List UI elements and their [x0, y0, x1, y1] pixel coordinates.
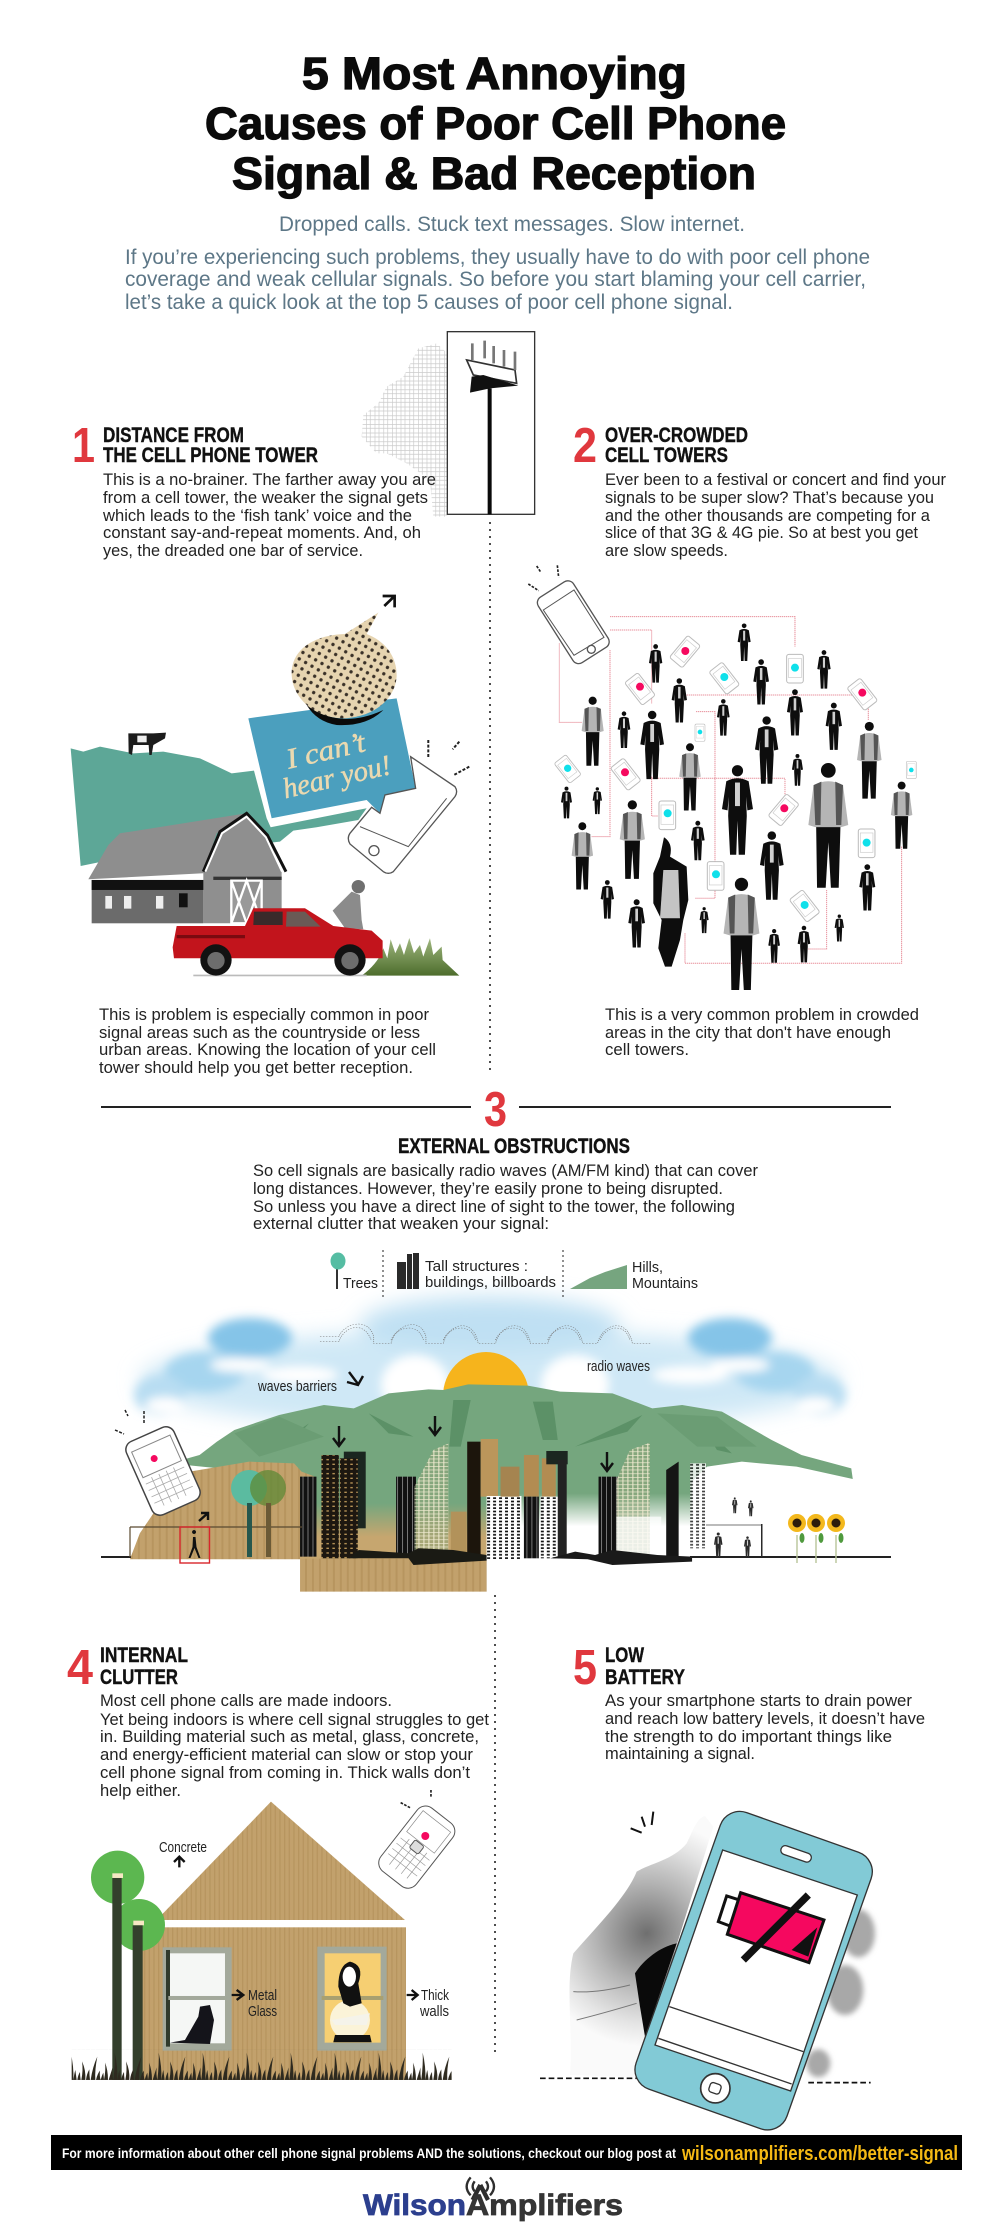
arrows: wave barrier markers [333, 1372, 613, 1471]
panel: cause 1 distance from tower [71, 419, 469, 1077]
logo: Wilson Amplifiers: Wilson [363, 2189, 466, 2222]
trees [91, 1851, 165, 2080]
blackberry phone [123, 1424, 203, 1518]
title: 5 Most Annoying [302, 48, 687, 99]
dotted divider: lower [494, 1595, 496, 2056]
heading 4 [100, 1644, 188, 1689]
title [205, 48, 786, 199]
caption 1 [99, 1005, 436, 1077]
man at hood [333, 880, 365, 929]
cardboard hill and base [130, 1462, 315, 1559]
speech card: I can't hear you [248, 698, 416, 818]
heading 4: CLUTTER [100, 1666, 178, 1689]
caption 2 [605, 1005, 919, 1059]
grass [72, 2050, 452, 2080]
body text 5: the strength to do important things like [605, 1727, 892, 1746]
dashed ground line [540, 2078, 871, 2083]
heading 3: EXTERNAL OBSTRUCTIONS [398, 1135, 630, 1158]
body text 4: Most cell phone calls are made indoors. [100, 1691, 392, 1710]
pedestrian in red box [180, 1527, 210, 1563]
label: thick walls [419, 1988, 450, 2020]
icon: hill [570, 1265, 627, 1289]
heading 1: DISTANCE FROM [103, 424, 244, 447]
buildings [300, 1439, 706, 1565]
body text 1: This is a no-brainer. The farther away you are [103, 470, 436, 489]
legend label: tall structures: buildings, billboards [425, 1275, 556, 1291]
body text 5: and reach low battery levels, it doesn’t have [605, 1709, 925, 1728]
heading 2: CELL TOWERS [605, 444, 728, 467]
signal ticks [631, 1812, 653, 1833]
body text 1: constant say-and-repeat moments. And, oh [103, 523, 421, 542]
dotted divider: upper [489, 522, 491, 1070]
intro text block: let’s take a quick look at the top 5 causes of poor cell phone signal. [125, 291, 733, 314]
legend [330, 1250, 698, 1299]
body text 4: Yet being indoors is where cell signal struggles to get [100, 1710, 489, 1729]
body text 3: So cell signals are basically radio waves (AM/FM kind) that can cover [253, 1161, 758, 1180]
body text 4: cell phone signal from coming in. Thick walls don’t [100, 1763, 470, 1782]
body text 4: in. Building material such as metal, glass, concrete, [100, 1727, 479, 1746]
caption 1: tower should help you get better reception. [99, 1058, 413, 1077]
barn [88, 813, 286, 923]
footer bar: For more information about other cell phone signal problems AND the solutions, checkout our blog post at [62, 2146, 676, 2161]
icon: tree [330, 1252, 346, 1289]
footer bar [51, 2135, 962, 2170]
legend label: hills: Hills, [632, 1260, 663, 1276]
icon: antenna [467, 2177, 494, 2200]
panel: cause 2 over-crowded towers [528, 419, 946, 1059]
label: concrete: Concrete [159, 1840, 207, 1856]
battery icon [718, 1893, 824, 1963]
arrow [199, 1513, 208, 1521]
caption 1: signal areas such as the countryside or less [99, 1023, 420, 1042]
illustration: sky and clouds [134, 1297, 846, 1430]
heading 5: BATTERY [605, 1666, 685, 1689]
dotted speech balloon [292, 613, 397, 725]
radio waves [320, 1324, 651, 1343]
body text 2: and the other thousands are competing for a [605, 506, 931, 525]
wall [142, 1927, 406, 2080]
caption 2: areas in the city that don't have enough [605, 1023, 891, 1042]
label: metal glass: Metal [248, 1988, 277, 2004]
arrow [383, 596, 395, 607]
heading 5 [605, 1644, 685, 1689]
body text 4: and energy-efficient material can slow or stop your [100, 1745, 473, 1764]
body text 2: slice of that 3G & 4G pie. So at best you get [605, 523, 918, 542]
legend label: tall structures: Tall structures : [425, 1259, 528, 1275]
logo: Wilson Amplifiers [363, 2177, 623, 2222]
illustration: city map and cell tower [362, 332, 535, 517]
intro text block: If you’re experiencing such problems, they usually have to do with poor cell phone [125, 246, 870, 269]
body text 2: signals to be super slow? That’s because you [605, 488, 934, 507]
body text 1: which leads to the ‘fish tank’ voice and the [102, 506, 412, 525]
legend label: trees: Trees [343, 1276, 378, 1292]
labels on city: waves barriers: waves barriers [257, 1379, 337, 1395]
legend label: tall structures [425, 1259, 556, 1291]
subtitle: Dropped calls. Stuck text messages. Slow internet. [279, 213, 745, 236]
body text 4: help either. [100, 1781, 181, 1800]
caption 2: This is a very common problem in crowded [605, 1005, 919, 1024]
body text 5 [605, 1691, 925, 1763]
heading 2: OVER-CROWDED [605, 424, 748, 447]
big phone outline [528, 565, 612, 666]
overhead wire [130, 1527, 302, 1557]
label: thick walls: Thick [421, 1988, 450, 2004]
illustration: barn, truck and phone [71, 596, 469, 976]
illustration: crowd with phones [528, 565, 916, 990]
caption 2: cell towers. [605, 1040, 689, 1059]
phone [629, 1806, 878, 2136]
number 5: 5 [573, 1641, 597, 1695]
people and footbridge [706, 1497, 762, 1557]
illustration: mountains and city [130, 1384, 853, 1592]
speech card: I can't hear you: I can’t [282, 726, 369, 776]
cow [128, 733, 166, 755]
heading 4: INTERNAL [100, 1644, 188, 1667]
title: Causes of Poor Cell Phone [205, 98, 786, 149]
illustration: hand holding phone with low battery [540, 1806, 878, 2136]
icon: buildings [397, 1253, 419, 1289]
heading 1: THE CELL PHONE TOWER [103, 444, 318, 467]
divider lines and number 3: 3 [484, 1083, 507, 1137]
legend label: hills [632, 1260, 698, 1292]
grass [362, 938, 459, 976]
roof [157, 1802, 405, 1920]
logo: Wilson Amplifiers: Amplifiers [466, 2189, 623, 2222]
bar phone [374, 1802, 459, 1892]
label: metal glass: Glass [248, 2004, 277, 2020]
sun [443, 1352, 529, 1440]
body text 1 [102, 470, 436, 560]
green hill [71, 747, 367, 866]
window with cat [163, 1947, 232, 2051]
body text 3: external clutter that weaken your signal: [253, 1214, 549, 1233]
speech card: I can't hear you: hear you! [280, 749, 394, 805]
body text 1: from a cell tower, the weaker the signal gets [103, 488, 428, 507]
sunflowers [788, 1514, 845, 1563]
intro text block [125, 246, 870, 314]
body text 5: maintaining a signal. [605, 1744, 755, 1763]
panel: cause 5 low battery [540, 1641, 925, 2136]
intro text block: coverage and weak cellular signals. So before you start blaming your cell carrier, [125, 268, 866, 291]
legend label: hills: Mountains [632, 1276, 698, 1292]
heading 1 [103, 424, 318, 467]
window with woman on phone [317, 1947, 387, 2051]
red truck [173, 908, 383, 976]
body text 2: Ever been to a festival or concert and find your [605, 470, 946, 489]
body text 4 [100, 1691, 489, 1800]
body text 3: So unless you have a direct line of sight to the tower, the following [253, 1197, 735, 1216]
body text 3 [253, 1161, 758, 1233]
panel: cause 4 internal clutter [67, 1641, 489, 2080]
ground line [101, 1556, 891, 1558]
body text 3: long distances. However, they’re easily prone to being disrupted. [253, 1179, 723, 1198]
phone outline [348, 740, 469, 873]
trees [231, 1470, 286, 1557]
label: thick walls: walls [419, 2004, 449, 2020]
signal ticks [115, 1410, 144, 1434]
people [561, 623, 912, 990]
arrows [174, 1857, 418, 2000]
small phones with signal dots [554, 635, 916, 922]
caption 1: This is problem is especially common in poor [99, 1005, 429, 1024]
title: Signal & Bad Reception [232, 148, 756, 199]
illustration: house [72, 1790, 459, 2080]
number 1: 1 [72, 419, 95, 473]
number 4: 4 [67, 1641, 93, 1695]
caption 1: urban areas. Knowing the location of your cell [99, 1040, 436, 1059]
connecting signal lines [559, 617, 902, 963]
number 2: 2 [573, 419, 597, 473]
panel: cause 3 external obstructions [101, 1083, 891, 1592]
body text 2: are slow speeds. [605, 541, 728, 560]
heading 2 [605, 424, 748, 467]
hand [569, 1816, 875, 2077]
body text 2 [605, 470, 946, 560]
labels on city: radio waves: radio waves [587, 1359, 650, 1375]
heading 5: LOW [605, 1644, 644, 1667]
body text 1: yes, the dreaded one bar of service. [103, 541, 363, 560]
body text 5: As your smartphone starts to drain power [605, 1691, 912, 1710]
label: metal glass [248, 1988, 277, 2020]
